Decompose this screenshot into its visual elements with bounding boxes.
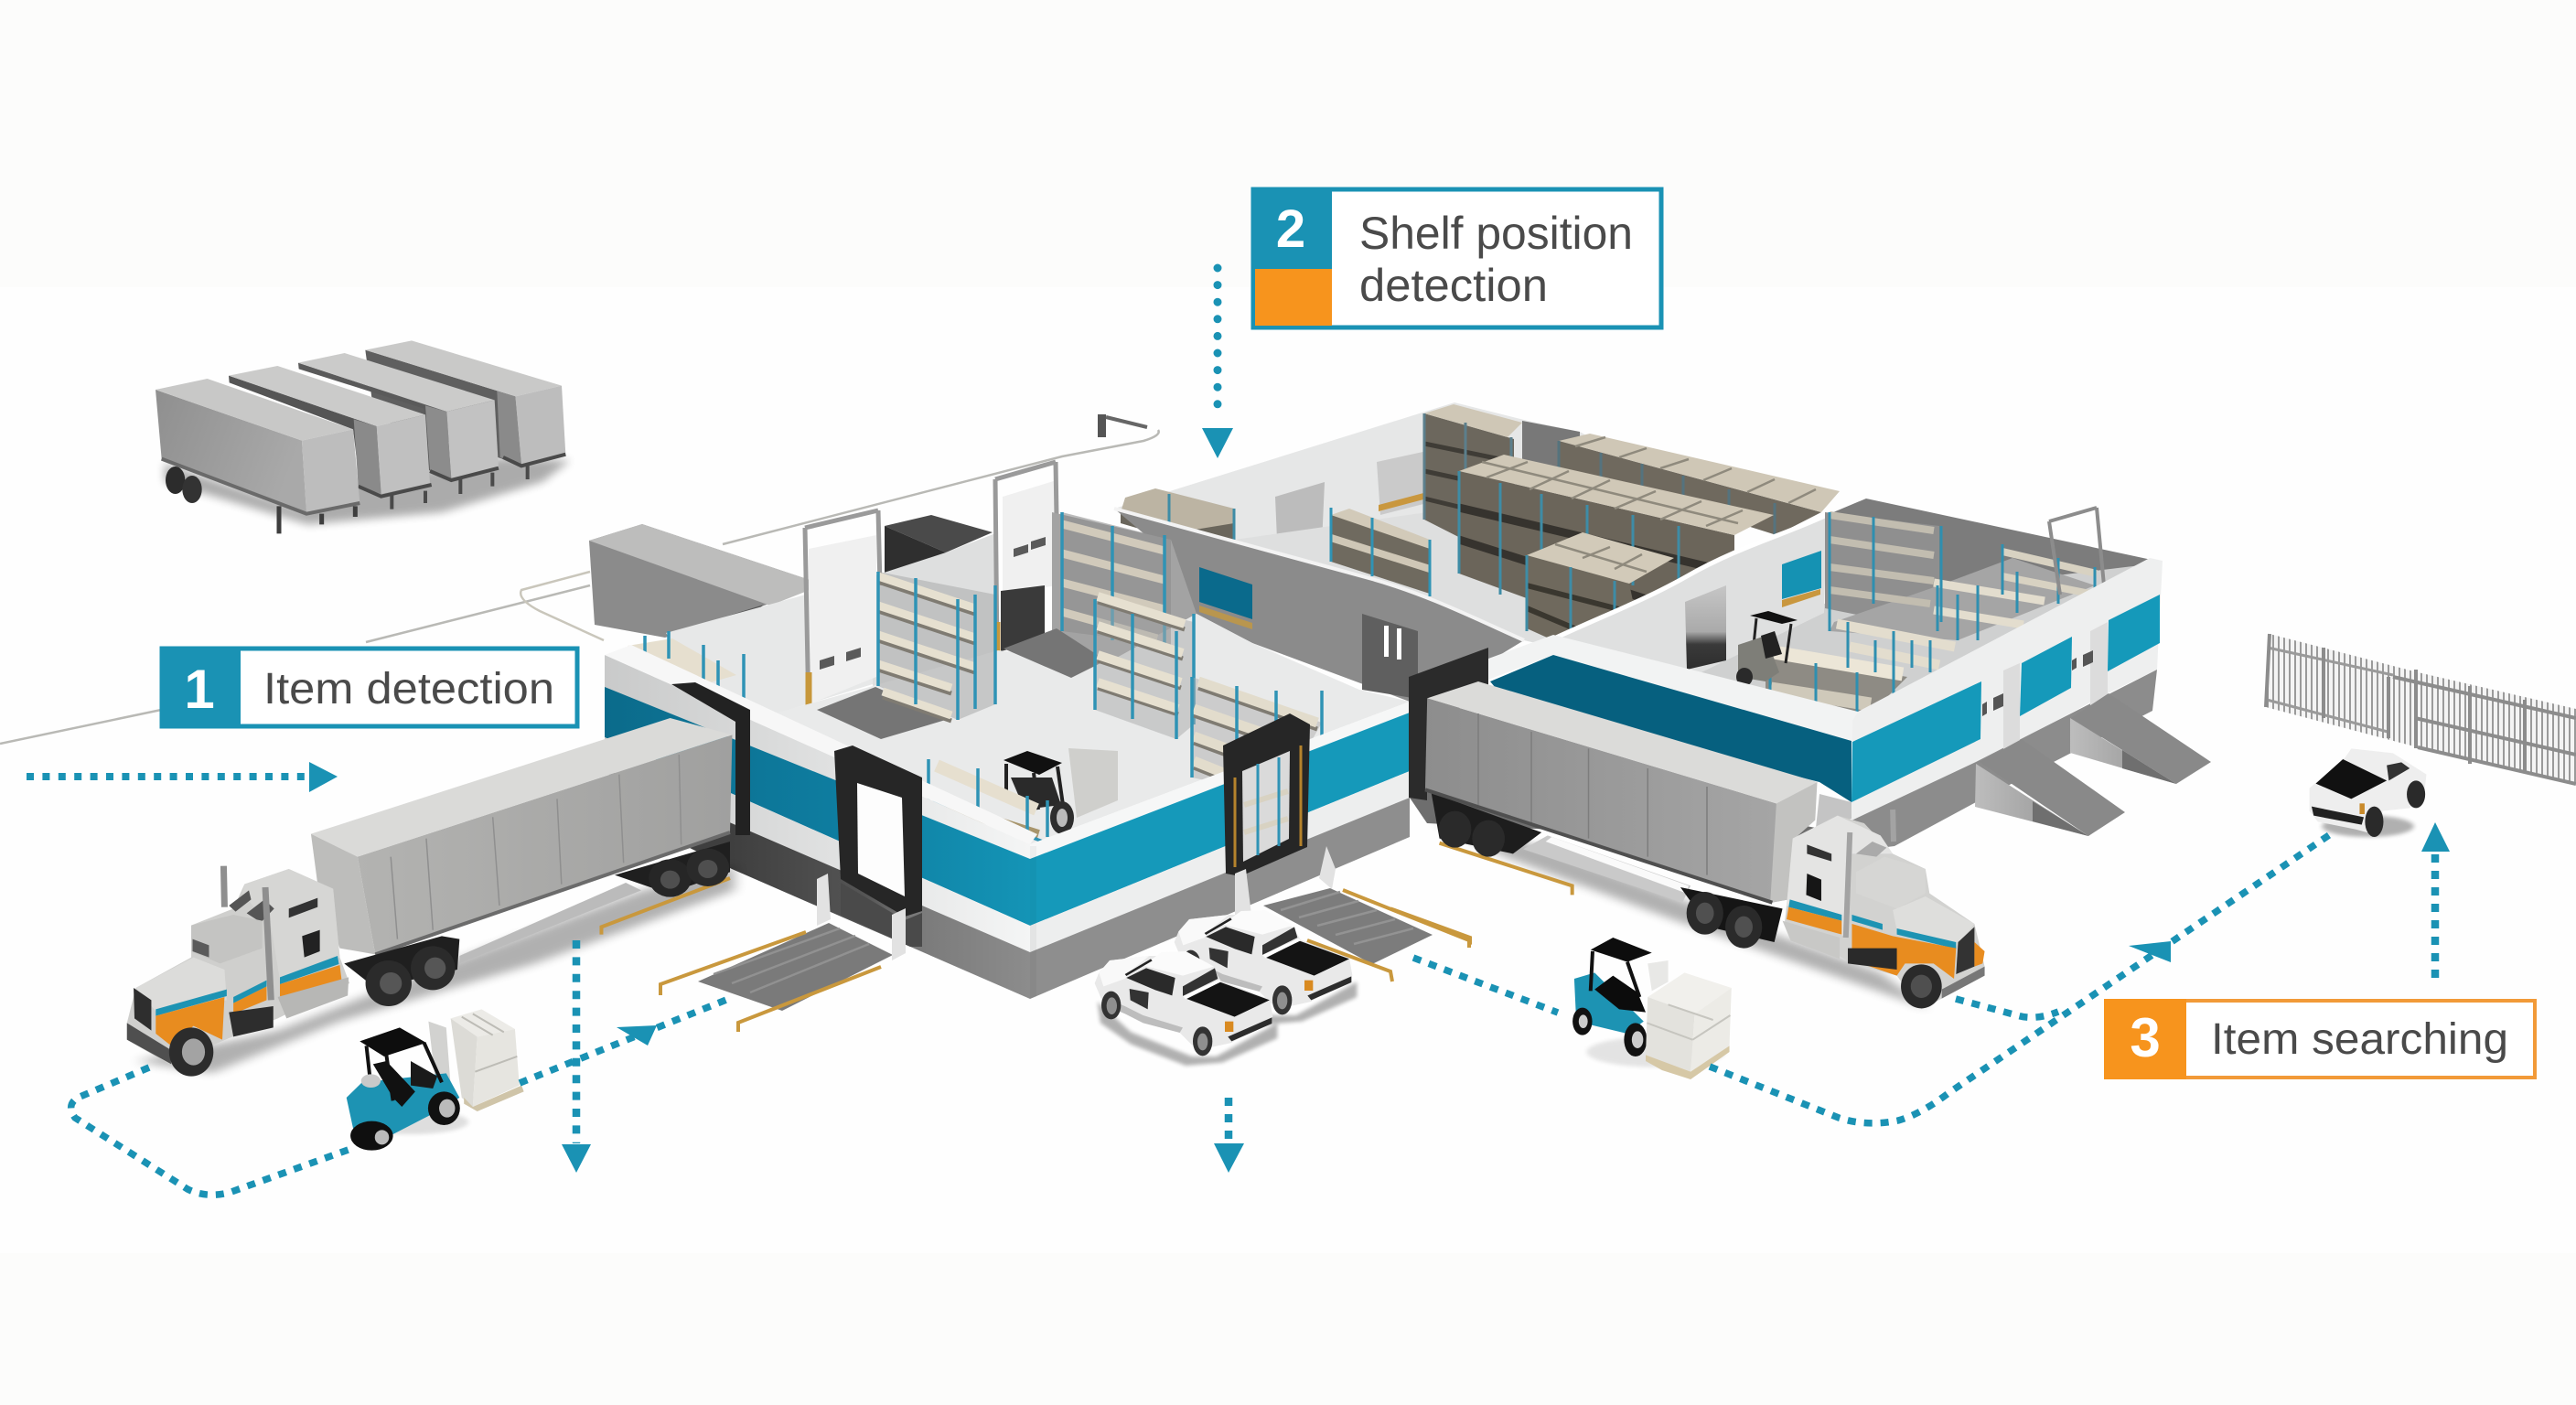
parked trailers	[156, 340, 570, 533]
arrow: down to shelves	[1202, 268, 1233, 458]
wall-mounted sensor arm	[1098, 414, 1147, 437]
route: right truck link	[1956, 999, 2058, 1017]
floor backdrop	[0, 287, 2576, 1253]
callout 2: shelf position detection: Shelf position	[1359, 208, 1633, 259]
front wheel	[169, 1027, 213, 1077]
hood	[127, 915, 274, 1064]
rear shaded area	[1052, 512, 1197, 663]
trailer 4	[365, 340, 565, 479]
truck bed	[2316, 759, 2387, 799]
hood	[1848, 857, 1985, 999]
teal panel 2	[2020, 637, 2072, 716]
dock shelter far right	[1409, 648, 1488, 800]
main room back walls	[666, 414, 1197, 727]
dark teal long wall	[1490, 655, 1852, 802]
rack centre	[1095, 596, 1194, 739]
bumper	[2312, 807, 2364, 825]
trailer 3	[298, 353, 499, 494]
swing door	[1685, 585, 1726, 670]
teal panel 3	[2108, 595, 2160, 671]
trailer shadow	[165, 457, 570, 524]
cage and driver	[1591, 938, 1652, 1013]
dock shelter left	[671, 682, 750, 835]
wheels	[350, 1121, 393, 1151]
front-right wall	[1030, 702, 1413, 999]
long rear stack	[1559, 434, 1840, 540]
main room floor	[628, 614, 1410, 844]
callout 2: shelf position detection: 2	[1276, 199, 1305, 259]
dock leveller middle	[1235, 846, 1469, 981]
white curved partition	[1556, 515, 1827, 672]
dock shelter middle	[834, 745, 922, 947]
ramp B	[2070, 693, 2211, 784]
cab window	[2387, 762, 2410, 780]
boxes	[1646, 972, 1732, 1079]
right wing outer wall	[1852, 558, 2211, 851]
back room wall	[1114, 402, 1738, 585]
door frame at rear	[2049, 508, 2104, 595]
dark rear wall	[1827, 499, 2152, 640]
small windows	[1982, 650, 2093, 716]
right room floor	[1685, 565, 2141, 713]
route: truck to forklift	[71, 1067, 356, 1195]
callout 1: item detection	[160, 647, 577, 728]
trailer 2	[229, 366, 432, 509]
roll-up door	[1275, 482, 1325, 562]
right room	[1556, 499, 2152, 723]
large central stack	[1459, 455, 1774, 622]
arrow: inbound from left	[27, 762, 338, 792]
grey partition wall	[1114, 509, 1524, 702]
ground shadow	[135, 866, 735, 1073]
door column	[2003, 663, 2020, 767]
route: dock to right forklift	[1413, 958, 1558, 1013]
rack back left	[878, 572, 995, 721]
exhaust stacks	[1846, 810, 1894, 938]
rack near shelter	[1192, 677, 1322, 814]
trailer box	[1425, 681, 1818, 903]
body	[2310, 748, 2427, 835]
rack front corner	[928, 759, 1047, 842]
callout 3: item searching: 3	[2130, 1007, 2161, 1068]
front wheel	[1901, 964, 1942, 1008]
cab base	[127, 869, 349, 1064]
sleeper cab	[229, 869, 342, 996]
rack backing shade	[1825, 512, 1939, 631]
body	[347, 1073, 459, 1134]
forklift inside right room	[1736, 611, 1798, 686]
left truck	[127, 718, 735, 1077]
sleeper cab	[1787, 816, 1893, 936]
interior floor ramps	[817, 628, 1106, 739]
callout 2: shelf position detection: detection	[1359, 260, 1548, 311]
back room floor	[1171, 512, 1830, 681]
blue roll door	[1199, 567, 1252, 619]
right truck	[1390, 681, 1985, 1009]
trailer behind building	[589, 524, 823, 640]
front-left wall	[605, 645, 1037, 999]
pickup parked rear	[1175, 910, 1357, 1024]
loading-bay rail	[1440, 843, 1572, 895]
right wing near wall	[1410, 635, 1858, 842]
wall racks	[1770, 512, 2097, 713]
route: right forklift to gate pickup	[1710, 833, 2332, 1123]
wall cap	[1488, 635, 1858, 741]
arrow: down below pickups	[1214, 1098, 1244, 1173]
security fence and gate	[2266, 634, 2576, 784]
mid-left stack	[1331, 508, 1430, 596]
dock leveller left	[660, 874, 906, 1032]
body	[1574, 972, 1644, 1034]
drive wheels	[344, 936, 459, 1006]
cage and driver	[360, 1027, 442, 1107]
callout 1: item detection: Item detection	[263, 665, 554, 713]
cab base	[1785, 816, 1985, 1009]
trailer box	[311, 718, 732, 954]
rack left corner	[628, 631, 744, 702]
arrow: down from truck bay	[562, 940, 591, 1173]
left back wall	[666, 576, 873, 727]
teal door	[1782, 551, 1821, 599]
fuel tank	[278, 977, 349, 1018]
dock door posts and panels	[805, 462, 1057, 715]
callout 3: item searching: Item searching	[2211, 1015, 2508, 1064]
pickup parked front	[1095, 951, 1277, 1066]
double door	[1362, 614, 1418, 699]
arrow: up to gate	[2421, 822, 2450, 978]
exhaust stacks	[223, 866, 271, 1000]
container	[885, 515, 993, 585]
wall shelf stack	[1424, 404, 1522, 549]
wheels	[1572, 1008, 1593, 1035]
boxes	[451, 1009, 524, 1111]
rear wheels	[615, 842, 730, 897]
road lines	[0, 430, 1159, 744]
small front stack	[1527, 532, 1674, 649]
mast	[428, 1022, 451, 1086]
callout 2: shelf position detection	[1251, 188, 1661, 327]
mast	[1648, 960, 1669, 991]
rear wheels	[1432, 793, 1541, 857]
callout 1: item detection: 1	[184, 659, 215, 720]
left forklift	[347, 1009, 524, 1151]
grey wall section	[1522, 421, 1580, 480]
ramp A	[1975, 739, 2125, 836]
rack back centre	[1062, 512, 1171, 649]
side door	[1377, 451, 1427, 515]
wheels	[2365, 807, 2383, 837]
fuel tank	[1783, 921, 1840, 959]
right forklift	[1572, 938, 1732, 1079]
centre back wall	[873, 532, 998, 686]
loading-bay rail	[601, 878, 730, 935]
back storage shelving	[1121, 404, 1840, 649]
dock shelter right	[1223, 713, 1310, 876]
drive wheels	[1680, 887, 1783, 949]
forklift in main room	[1004, 748, 1118, 834]
main room racks	[628, 512, 1322, 842]
teal panel 1	[1852, 681, 1981, 802]
ground shadow	[1432, 820, 1929, 1009]
grey plinth	[1852, 670, 2157, 851]
route: forklift to dock	[520, 1000, 726, 1083]
pickup at gate	[2310, 748, 2427, 837]
top-left stack	[1121, 488, 1234, 543]
callout 3: item searching	[2104, 999, 2535, 1079]
trailer 1	[156, 379, 360, 533]
